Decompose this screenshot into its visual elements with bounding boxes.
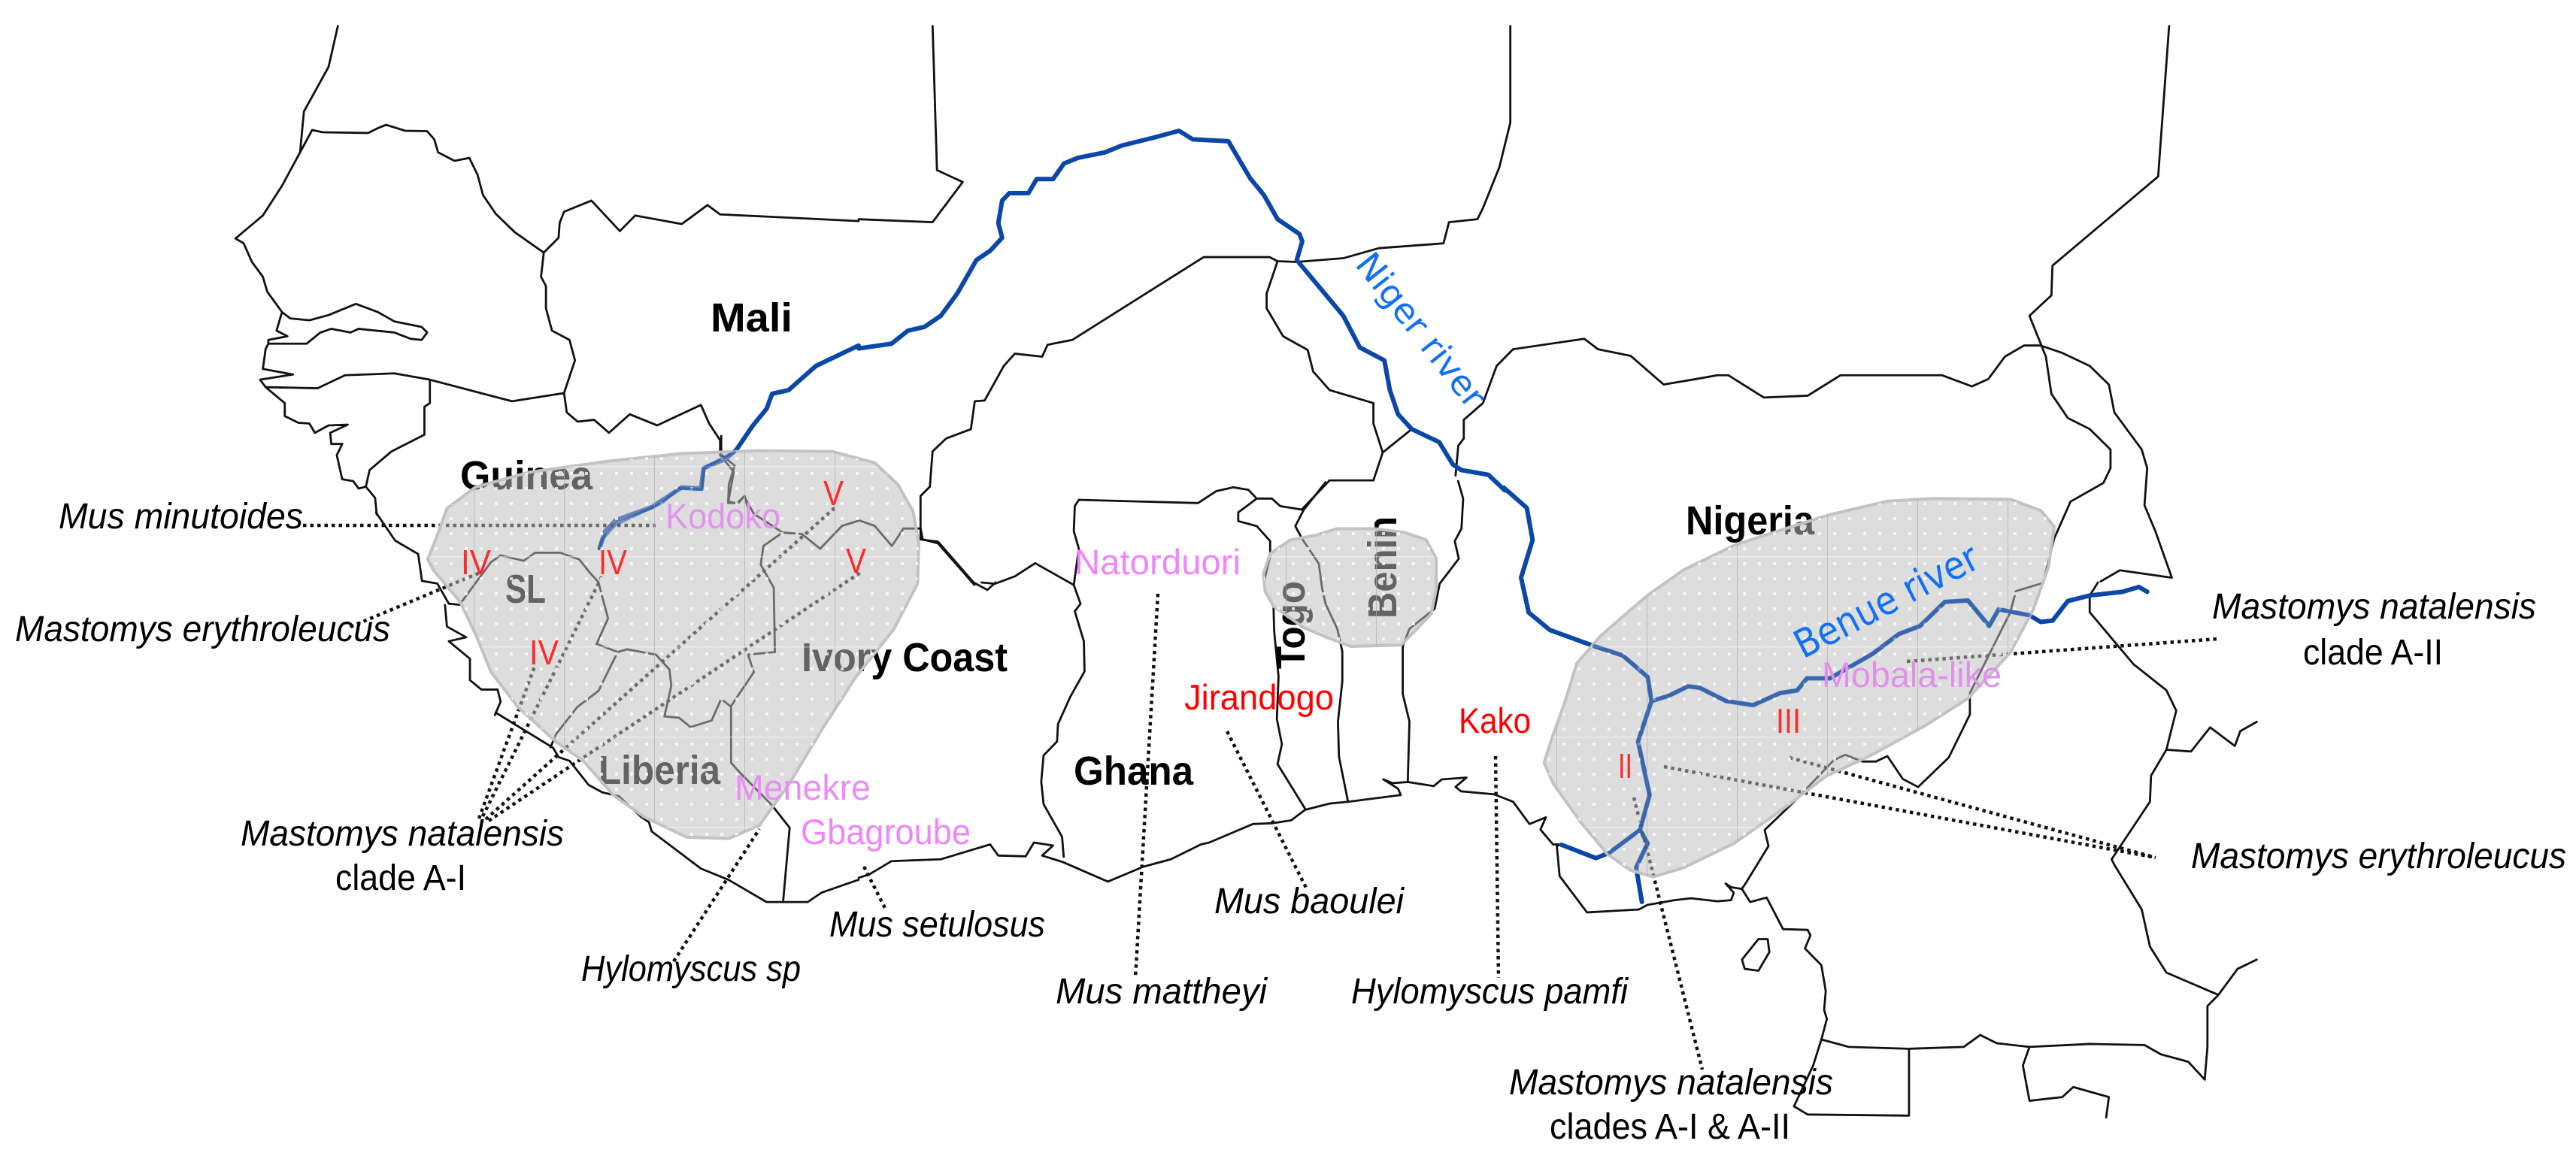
rodent host species labels: Mus setulosus	[829, 905, 1045, 945]
Lassa virus strain names: Gbagroube	[801, 812, 971, 852]
lineage numerals: V	[823, 474, 844, 513]
country names: Mali	[711, 295, 792, 340]
country names: Benin	[1360, 516, 1405, 619]
rodent host species labels: Mastomys erythroleucus	[2191, 837, 2566, 876]
rodent host species labels: Mastomys natalensis	[241, 814, 564, 854]
country names	[460, 295, 1815, 794]
rodent host species labels: Mus minutoides	[59, 497, 303, 537]
rodent host species labels: Hylomyscus sp	[581, 949, 801, 989]
rodent host species labels: Mastomys erythroleucus	[15, 610, 390, 649]
Lassa virus strain names: Kodoko	[665, 496, 780, 536]
rodent host species labels: Mastomys natalensis	[1509, 1063, 1833, 1103]
Lassa virus strain names: Menekre	[735, 767, 871, 807]
country names: SL	[505, 567, 546, 612]
dotted texture: western zone	[428, 451, 919, 839]
lineage numerals: V	[846, 541, 866, 580]
Niger and Benue rivers	[599, 131, 2147, 902]
river names	[1347, 244, 1987, 668]
country names: Guinea	[460, 453, 593, 498]
rodent host species labels: Hylomyscus pamfi	[1351, 972, 1629, 1012]
shaded endemic zone: Togo and Benin	[1263, 528, 1436, 646]
Lassa virus strain names: Kako	[1459, 701, 1531, 740]
country borders	[235, 26, 2256, 1118]
country names: Liberia	[599, 748, 721, 793]
rodent host species labels: clade A-II	[2303, 633, 2443, 673]
rodent host species labels: clade A-I	[335, 858, 466, 898]
Lassa virus strain names	[665, 496, 2002, 852]
river names: Niger river	[1347, 244, 1495, 416]
rodent host species labels: Mus baoulei	[1214, 882, 1405, 921]
lineage numerals: II	[1618, 746, 1632, 785]
shaded endemic zone: Nigeria	[1544, 498, 2054, 877]
Lassa virus strain names: Jirandogo	[1184, 677, 1334, 717]
river sections over the shaded zones	[599, 452, 2029, 867]
lineage numerals	[461, 474, 1801, 785]
country names: Ivory Coast	[802, 635, 1008, 680]
country names: Nigeria	[1686, 498, 1815, 543]
Lassa virus strain names: Natorduori	[1074, 542, 1241, 582]
river names: Benue river	[1787, 535, 1987, 668]
rodent host species labels: Mastomys natalensis	[2212, 587, 2536, 627]
dotted leader lines	[303, 507, 2218, 1070]
rodent host species labels	[15, 497, 2566, 1147]
Lassa virus strain names: Mobala-like	[1822, 655, 2002, 694]
country names: Ghana	[1074, 749, 1194, 794]
country names: Togo	[1268, 581, 1314, 669]
shaded endemic zone: western	[428, 451, 919, 839]
lineage numerals: IV	[461, 543, 491, 582]
dotted texture: Togo and Benin zone	[1263, 528, 1436, 646]
dotted texture: Nigeria zone	[1544, 498, 2054, 877]
lineage numerals: III	[1776, 701, 1801, 740]
rodent host species labels: clades A-I & A-II	[1550, 1107, 1790, 1147]
lineage numerals: IV	[529, 633, 559, 672]
rodent host species labels: Mus mattheyi	[1056, 972, 1268, 1012]
lineage numerals: IV	[599, 543, 627, 582]
